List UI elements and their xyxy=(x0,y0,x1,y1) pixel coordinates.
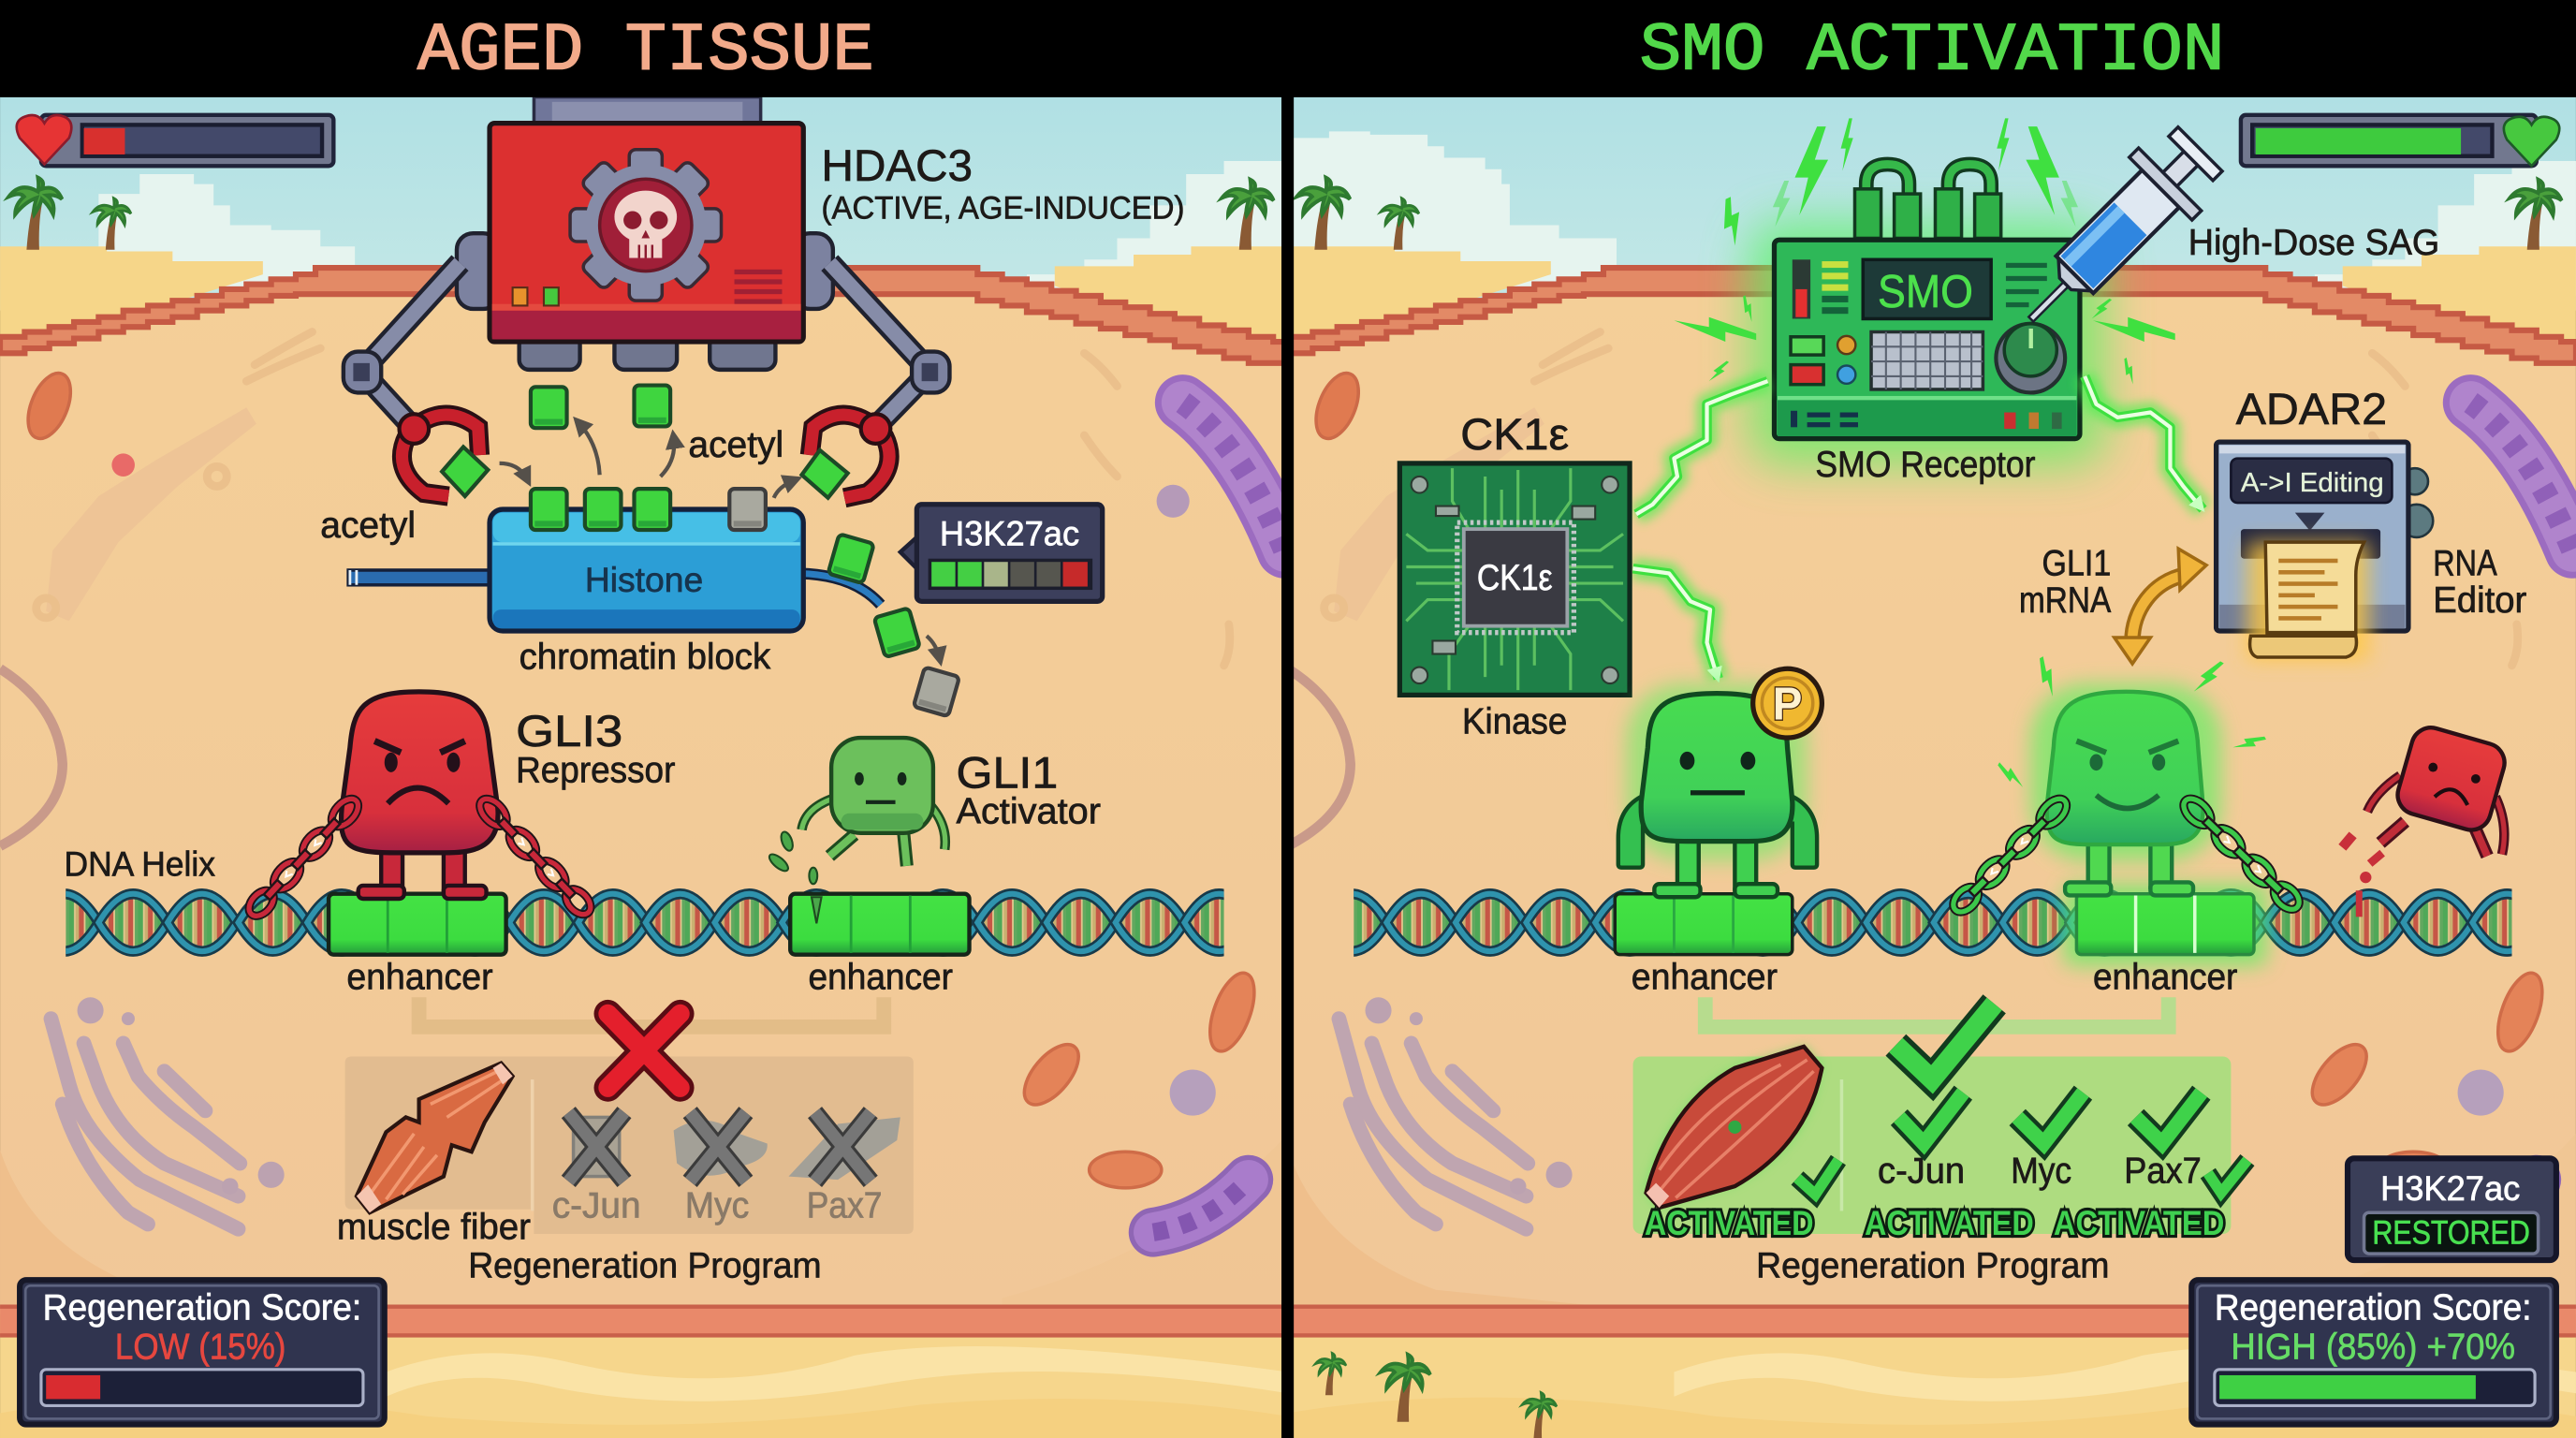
arrows: acetyl removal xyxy=(500,422,940,659)
label: c-Jun: c-Jun xyxy=(1878,1152,1965,1192)
label: GLI3: GLI3 xyxy=(516,707,622,756)
ADAR2 RNA editor machine: A->I Editing xyxy=(2241,468,2384,498)
background organelles xyxy=(111,453,1190,518)
label: ACTIVATED muscle: ACTIVATED xyxy=(1645,1204,1814,1242)
panel: regeneration program blocked: Myc xyxy=(685,1185,749,1225)
icon: gene Myc crossed xyxy=(674,1112,768,1181)
character: GLI3 repressor xyxy=(244,692,595,920)
label: Myc: Myc xyxy=(2011,1152,2071,1192)
icon: phosphate badge: P xyxy=(1773,680,1802,730)
title: aged tissue: AGED TISSUE xyxy=(417,13,874,90)
CK1ε kinase chip: CK1ε xyxy=(1477,558,1553,598)
panel: regeneration program blocked: c-Jun xyxy=(552,1185,641,1225)
label: ADAR2: ADAR2 xyxy=(2236,385,2387,434)
bottom palm trees xyxy=(1315,1353,1557,1438)
SMO receptor machine xyxy=(1774,165,2080,439)
callout: H3K27ac restored xyxy=(2348,1158,2556,1260)
callout: H3K27ac restored: RESTORED xyxy=(2372,1215,2530,1252)
label: acetyl left: acetyl xyxy=(320,506,416,546)
label: GLI3: Repressor xyxy=(516,750,675,790)
connector bracket xyxy=(419,997,884,1027)
panel: regeneration program blocked: Pax7 xyxy=(807,1185,883,1225)
label: HDAC3: (ACTIVE, AGE-INDUCED) xyxy=(822,190,1184,226)
sky xyxy=(0,97,1288,311)
label: Pax7: Pax7 xyxy=(2124,1152,2202,1192)
panel: regeneration score high xyxy=(2191,1280,2556,1425)
icon: phosphate badge xyxy=(1753,668,1822,738)
label: HDAC3 xyxy=(822,141,1184,226)
health bar high xyxy=(2241,115,2559,166)
label: GLI1 xyxy=(956,749,1101,831)
character: GLI1 phosphorylated xyxy=(1618,668,1822,897)
label: RNA Editor: Editor xyxy=(2433,580,2526,621)
health bar low xyxy=(17,115,333,166)
arrow: gold two-way xyxy=(2115,549,2206,664)
label: Regeneration Program: Regeneration Program xyxy=(468,1246,822,1285)
callout: H3K27ac restored: H3K27ac xyxy=(2380,1169,2520,1208)
label: chromatin block: chromatin block xyxy=(520,637,771,677)
panel background: cell scene xyxy=(0,161,1288,1438)
label: GLI1 mRNA: mRNA xyxy=(2019,580,2111,621)
panel: aged tissue xyxy=(0,97,1288,1438)
cloud xyxy=(98,174,355,287)
label: enhancer right: enhancer xyxy=(2093,958,2238,998)
sky xyxy=(1288,97,2576,311)
left claw xyxy=(400,414,488,496)
label: ACTIVATED Myc: ACTIVATED xyxy=(2054,1204,2224,1242)
callout: H3K27ac gauge xyxy=(900,505,1103,601)
cloud xyxy=(1288,131,1643,287)
connector bracket active xyxy=(1705,997,2169,1027)
DNA helix xyxy=(1318,894,2541,951)
icon: syringe High-Dose SAG xyxy=(1999,118,2232,350)
callout: H3K27ac gauge: H3K27ac xyxy=(940,515,1079,553)
label: muscle fiber: muscle fiber xyxy=(337,1207,531,1247)
label: acetyl right: acetyl xyxy=(688,425,783,465)
label: GLI1 mRNA: GLI1 xyxy=(2042,543,2111,583)
label: CK1ε title: CK1ε xyxy=(1460,410,1569,460)
label: GLI1: GLI1 xyxy=(956,749,1058,799)
label: enhancer right: enhancer xyxy=(809,958,953,998)
label: SMO Receptor: SMO Receptor xyxy=(1815,445,2036,485)
detached acetyl groups xyxy=(828,534,959,716)
character: GLI1 charged with broken chains xyxy=(1949,656,2304,917)
label: RNA Editor: RNA xyxy=(2433,543,2497,583)
title: SMO activation: SMO ACTIVATION xyxy=(1640,13,2224,90)
DNA helix xyxy=(30,894,1253,951)
panel: regeneration score high: Regeneration Score: xyxy=(2215,1287,2532,1328)
icon: skull gear xyxy=(570,150,722,301)
energy bolts xyxy=(1674,118,2175,386)
label: Kinase: Kinase xyxy=(1462,702,1567,742)
enhancer block 2 active xyxy=(2063,884,2267,966)
panel: regeneration program blocked xyxy=(345,1056,914,1234)
enhancer block 2 xyxy=(790,894,970,955)
panel background: cell scene xyxy=(1288,161,2576,1438)
icon: red X xyxy=(607,1014,681,1088)
label: RNA Editor xyxy=(2433,543,2526,621)
free acetyl groups xyxy=(531,386,670,428)
histone chromatin block xyxy=(348,489,881,631)
energy links xyxy=(1633,376,2203,679)
label: High-Dose SAG: High-Dose SAG xyxy=(2188,223,2439,263)
label: GLI1: Activator xyxy=(956,791,1101,831)
label: HDAC3: HDAC3 xyxy=(822,141,973,191)
character: GLI1 activator xyxy=(767,738,945,923)
icon: mRNA scroll xyxy=(2247,542,2369,661)
label: enhancer left: enhancer xyxy=(1632,958,1778,998)
ADAR2 RNA editor machine xyxy=(2217,442,2433,661)
icon: check marks xyxy=(1797,1004,2247,1195)
label: Regeneration Program: Regeneration Program xyxy=(1756,1246,2110,1285)
panel: regeneration score low: LOW (15%) xyxy=(115,1327,285,1367)
panel: regeneration score low: Regeneration Score: xyxy=(43,1287,361,1328)
enhancer block 1 active xyxy=(1615,894,1793,955)
label: DNA Helix: DNA Helix xyxy=(65,844,216,883)
icon: healthy muscle fiber xyxy=(1645,1045,1822,1208)
HDAC3 machine xyxy=(344,97,949,498)
right claw xyxy=(802,414,890,498)
icon: torn muscle fiber xyxy=(357,1064,513,1212)
CK1ε kinase chip xyxy=(1399,463,1630,695)
label: enhancer left: enhancer xyxy=(346,958,493,998)
panel: regeneration program active xyxy=(1633,1045,2231,1242)
label: GLI1 mRNA xyxy=(2019,543,2111,621)
icon: gene Pax7 crossed xyxy=(788,1112,900,1181)
glow behind SMO machine xyxy=(1748,220,2106,466)
panel: regeneration score high: HIGH (85%) +70% xyxy=(2231,1327,2515,1367)
panel: regeneration score low xyxy=(20,1280,385,1425)
label: ACTIVATED c-Jun: ACTIVATED xyxy=(1865,1204,2034,1242)
enhancer block 1 xyxy=(329,894,506,955)
SMO receptor machine: SMO xyxy=(1878,267,1973,317)
label: GLI3 xyxy=(516,707,675,790)
histone chromatin block: Histone xyxy=(585,561,703,599)
icon: gene c-Jun crossed xyxy=(568,1112,624,1181)
character: fleeing GLI3 xyxy=(2338,723,2510,917)
panel: SMO activation xyxy=(1288,97,2576,1438)
